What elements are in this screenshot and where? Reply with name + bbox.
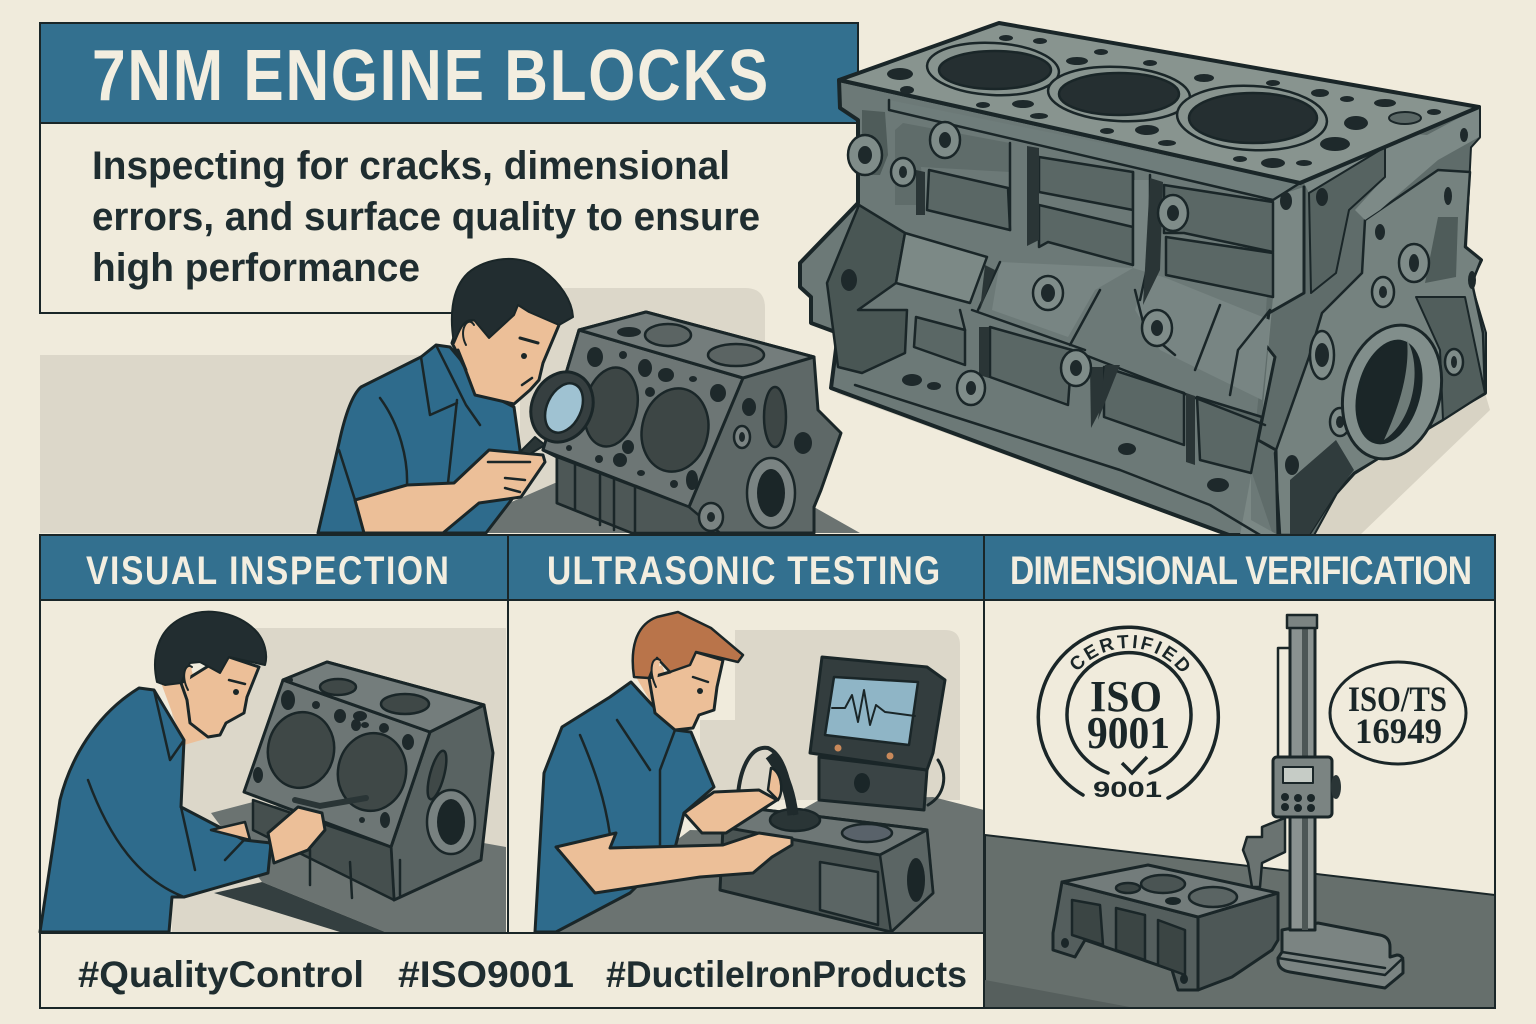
table — [486, 483, 860, 533]
badge: ISO 9001 certified: 9001 — [1093, 777, 1162, 802]
engine block on table — [1053, 865, 1278, 990]
bottom strip: hashtags: #DuctileIronProducts — [606, 954, 967, 995]
top deck — [839, 23, 1479, 183]
title banner — [40, 23, 858, 123]
title banner: 7NM ENGINE BLOCKS — [92, 36, 768, 116]
badge: ISO 9001 certified — [1036, 626, 1220, 802]
bottom strip: hashtags — [40, 933, 984, 1008]
probe and cable — [738, 748, 795, 815]
badge: ISO/TS 16949 — [1330, 662, 1466, 764]
engine block flat — [720, 807, 933, 932]
panel frame — [40, 535, 1495, 1008]
badge: ISO 9001 certified: 9001 — [1087, 707, 1170, 758]
bottom strip: hashtags: #ISO9001 — [398, 954, 574, 995]
hero scene: inspector with magnifier — [40, 259, 860, 533]
illustration: large engine block — [800, 23, 1490, 535]
subtitle text block: high performance — [92, 246, 420, 290]
inspector figure — [40, 612, 325, 932]
subtitle text block: Inspecting for cracks, dimensional — [92, 144, 730, 188]
front recesses — [914, 157, 1273, 473]
panel: visual inspection — [40, 612, 506, 932]
digital height gauge — [1243, 615, 1403, 988]
crankshaft bore — [1328, 314, 1456, 470]
magnifying glass — [520, 362, 604, 454]
small engine block — [543, 312, 841, 533]
section headers: ULTRASONIC TESTING — [547, 548, 940, 593]
section headers: VISUAL INSPECTION — [86, 548, 449, 593]
inspector figure — [318, 259, 604, 533]
subtitle text block — [40, 123, 760, 313]
badge: ISO/TS 16949: ISO/TS — [1348, 679, 1447, 719]
badge: ISO/TS 16949: 16949 — [1355, 711, 1442, 751]
panel: dimensional verification — [985, 614, 1494, 1007]
section headers: DIMENSIONAL VERIFICATION — [1010, 548, 1472, 593]
section headers — [40, 535, 1495, 600]
dark ribs — [916, 146, 1195, 465]
bottom strip: hashtags: #QualityControl — [78, 954, 364, 995]
badge: ISO 9001 certified: ISO — [1090, 672, 1162, 721]
bolt bosses — [848, 122, 1463, 436]
subtitle text block: errors, and surface quality to ensure — [92, 195, 760, 239]
engine block upright — [244, 662, 493, 900]
technician figure — [535, 612, 792, 932]
ultrasonic monitor — [810, 657, 945, 810]
badge: ISO 9001 certified: CERTIFIED — [1070, 634, 1190, 672]
panel: ultrasonic testing — [535, 612, 984, 932]
